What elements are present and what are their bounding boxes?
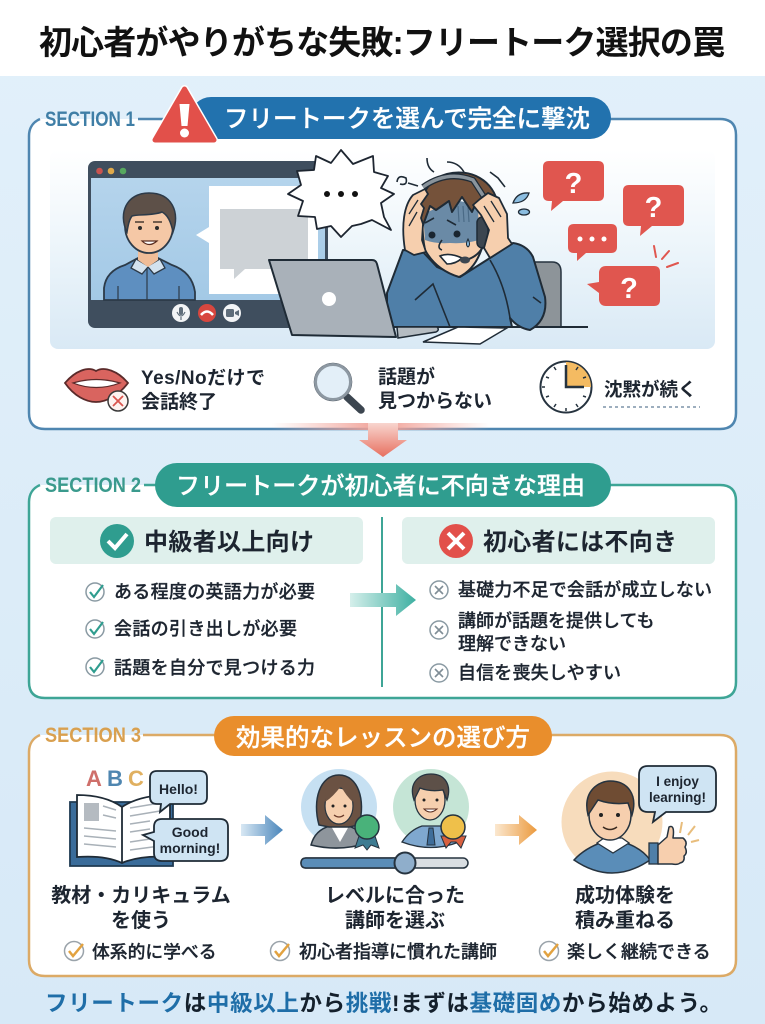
red question bubbles: ? (620, 273, 638, 305)
happy learner (562, 766, 716, 873)
arrow: left column to right column (350, 584, 416, 616)
bubble: I enjoy learning: learning! (649, 790, 706, 805)
list item: 基礎力不足で会話が成立しない (458, 579, 712, 600)
bubble: Good morning: morning! (160, 840, 220, 856)
icon: lips with X (65, 369, 128, 411)
step 3 caption: 成功体験を (575, 883, 675, 907)
ABC letters: C (128, 766, 144, 791)
list item: 自信を喪失しやすい (458, 663, 621, 683)
section 2 heading pill: フリートークが初心者に不向きな理由 (176, 473, 585, 500)
text: Yes/No: 会話終了 (141, 391, 217, 413)
section 1 heading pill: フリートークを選んで完全に撃沈 (224, 105, 590, 133)
female teacher (301, 769, 377, 848)
column: for intermediate learners (50, 517, 363, 678)
illustration background panel (50, 150, 715, 349)
ABC letters: B (107, 766, 123, 791)
right hand (473, 193, 512, 258)
eyes and mouth (428, 232, 436, 238)
headset (423, 176, 486, 200)
step 2 caption: 講師を選ぶ (345, 909, 445, 932)
red question bubbles: ? (565, 168, 582, 200)
face (422, 205, 484, 277)
step 1 caption: を使う (111, 909, 171, 932)
benefit: step 1: 体系的に学べる (92, 942, 216, 962)
bubble: I enjoy learning: I enjoy (656, 774, 699, 789)
table line (395, 326, 588, 328)
text: silence: 沈黙が続く (604, 379, 697, 400)
section 1 frame (29, 119, 736, 429)
gloom across upper face (423, 200, 479, 243)
arrow: section 1 to section 2 (272, 423, 490, 457)
arrow: step 2 to step 3 (495, 815, 537, 845)
text: Yes/No: Yes/Noだけで (141, 368, 265, 389)
benefit: step 2: 初心者指導に慣れた講師 (299, 942, 497, 962)
stressed man with headset (387, 158, 545, 330)
torso and arms (387, 243, 545, 330)
icon: textbook with speech bubbles (70, 766, 228, 866)
column header right: 初心者には不向き (483, 529, 677, 556)
bubble: Good morning: Good (172, 824, 208, 840)
level slider (301, 852, 468, 874)
stray hairs (397, 158, 505, 187)
section 3 heading pill (214, 716, 552, 756)
call control buttons (172, 304, 241, 322)
step 3 caption: 積み重ねる (575, 909, 675, 932)
list item: 会話の引き出しが必要 (114, 618, 297, 639)
starburst speech bubble (288, 150, 394, 237)
teachers with medals (301, 769, 469, 850)
list item: 講師が話題を提供しても (458, 610, 655, 631)
arrow: step 1 to step 2 (241, 815, 283, 845)
list item (430, 610, 655, 654)
paper on desk (423, 327, 507, 344)
bubble: Hello: Hello! (159, 781, 198, 797)
laptop (269, 260, 438, 338)
column: not for beginners (402, 517, 715, 683)
section 1 heading pill (190, 97, 611, 139)
icon: warning triangle (155, 89, 214, 140)
title: 初心者がやりがちな失敗:フリートーク選択の罠 (39, 24, 725, 61)
green medal (355, 815, 379, 850)
section 2 label: SECTION 2 (45, 474, 141, 497)
red question bubbles (543, 161, 684, 306)
section 1 label: SECTION 1 (45, 108, 135, 131)
panel: section 1 (29, 89, 736, 429)
video call window (88, 161, 328, 328)
text: no topic: 見つからない (378, 390, 492, 412)
icon: magnifier (314, 364, 361, 410)
icon: thumbs up (649, 822, 699, 864)
male teacher (393, 769, 469, 848)
bubble: Hello (150, 771, 207, 812)
list item: 理解できない (458, 634, 566, 654)
section 3 heading pill: 効果的なレッスンの選び方 (236, 724, 530, 752)
list item: 話題を自分で見つける力 (114, 658, 315, 678)
text: no topic: 話題が (378, 365, 435, 388)
sweat drops (513, 193, 529, 203)
teacher on screen (104, 193, 195, 300)
gold medal (441, 815, 466, 848)
footer message: フリートークは中級以上から挑戦!まずは基礎固めから始めよう。 (45, 991, 722, 1016)
panel: section 2 (29, 463, 736, 698)
chair (530, 262, 561, 327)
section 3 frame (29, 735, 736, 976)
step 2 caption: レベルに合った (325, 884, 465, 907)
column header left: 中級者以上向け (144, 529, 314, 556)
section 3 label: SECTION 3 (45, 724, 141, 747)
benefit: step 3: 楽しく継続できる (567, 942, 711, 962)
speech bubble on screen (196, 186, 318, 294)
section 2 heading pill (155, 463, 611, 507)
red question bubbles: ? (645, 192, 662, 224)
step 1 caption: 教材・カリキュラム (51, 884, 231, 907)
column header right (402, 517, 715, 564)
panel: section 3 (29, 716, 736, 976)
ABC letters: A (86, 766, 102, 791)
bubble: I enjoy learning (639, 766, 716, 822)
list item: ある程度の英語力が必要 (114, 581, 315, 602)
left hand (403, 189, 428, 255)
section 2 frame (29, 485, 736, 698)
column header left (50, 517, 363, 564)
icon: clock (540, 362, 592, 412)
hair (420, 172, 498, 228)
bubble: Good morning (143, 819, 228, 861)
